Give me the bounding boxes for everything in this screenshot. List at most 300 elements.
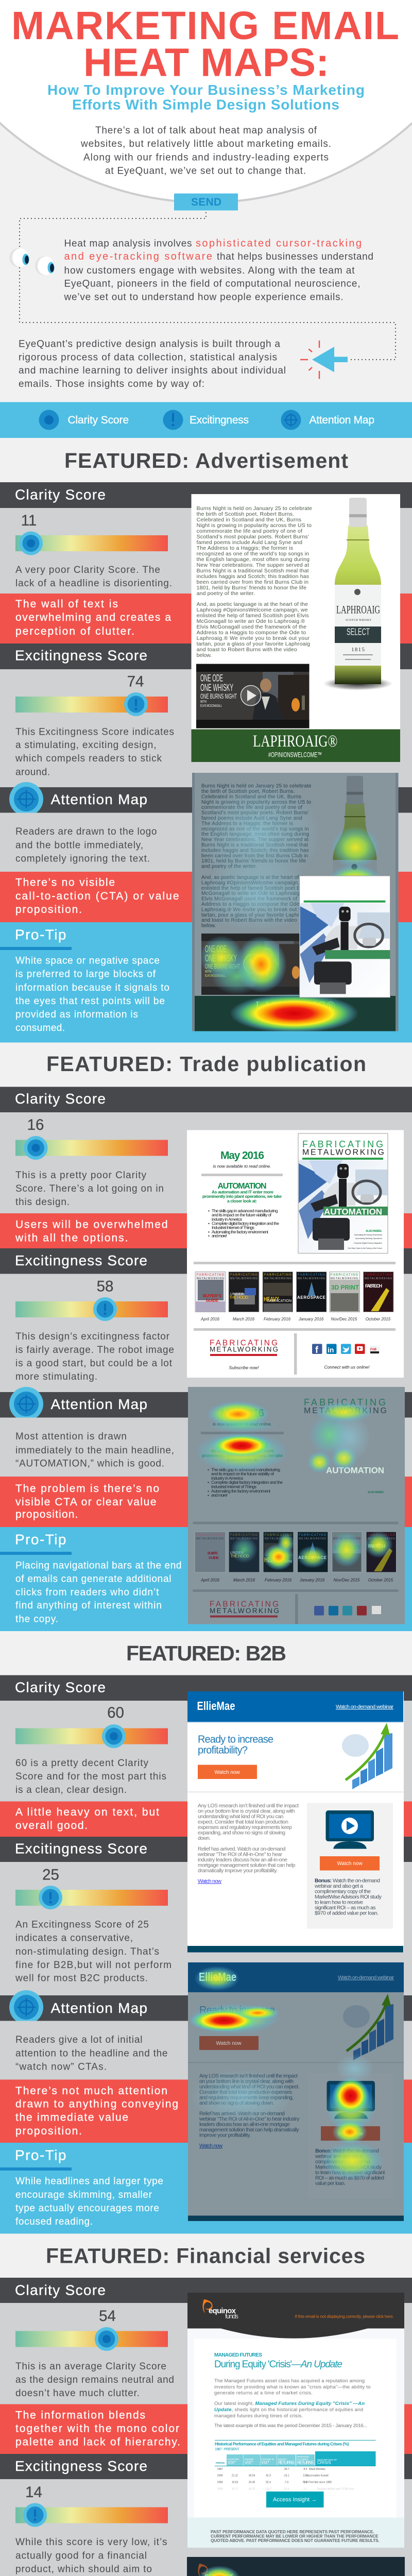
attention heat map: Ellie Mae: Ready to increase [199,2005,275,2016]
magazine cover: FABRICATING [302,1139,383,1149]
pro-tip panel: is preferred to large blocks of [15,969,156,980]
dotted path [20,213,396,360]
attention heat map: Fabricating Metalworking: AUTOMATION [326,1465,384,1476]
back-issue thumbnails: METALWORKING [365,1277,392,1280]
clarity score header: Clarity Score [15,1091,106,1107]
intro text [80,125,331,176]
heat map analysis paragraph: and eye-tracking software [64,251,212,262]
attention heat map: Ellie Mae: complimentary copy of the [315,2159,370,2165]
attention heat map: Ellie Mae [188,1962,404,2221]
clarity score header: Clarity Score [15,1680,106,1695]
attention heat map: Laphroaig: The Address to a Haggis; the former is [201,821,293,826]
callout: problem: The wall of text is [15,598,118,610]
excitingness panel: is fairly average. The robot image [15,1345,174,1355]
section heading: FEATURED: Trade publication [46,1052,366,1076]
performance table: ENDING [245,2458,254,2461]
performance table: 21.11 [232,2474,238,2477]
attention map panel: immediately to the main headline, [15,1445,174,1456]
bottle image: SCOTCH WHISKY [346,619,371,622]
attention heat map: Ellie Mae: to learn how to receive significant [315,2170,385,2176]
pro-tip panel: find anything of interest within [15,1600,162,1611]
social icons: in [328,1346,334,1354]
heat map analysis paragraph: EyeQuant, pioneers in the field of computational neuroscience, [64,278,360,290]
attention heat map: Fabricating Metalworking: May 2016 [220,1408,264,1419]
email screenshot: Equinox Funds: investors for providing what is known as "crisis alpha"—the ability to [214,2384,371,2390]
heat blobs [188,1966,384,2180]
clarity score panel: 16 [27,1116,44,1133]
attention map header [0,782,412,816]
pro-tip panel [0,2143,412,2234]
icon: eyes [9,248,55,275]
clarity gauge [15,532,168,555]
excitingness score header [0,1248,412,1274]
email screenshot: Fabricating Metalworking: May 2016 [220,1150,264,1161]
attention heat map: Laphroaig: WITH [205,970,211,974]
body copy: Relief has arrived. Watch our on-demand [199,2111,285,2116]
performance table: 1994 [217,2481,223,2484]
attention heat map: Fabricating Metalworking: October 2015 [368,1578,393,1583]
back-issue thumbnails: FABRICATING [365,1274,392,1277]
attention heat map: Fabricating Metalworking: METALWORKING [304,1406,387,1415]
email screenshot: Equinox Funds: The Managed Futures asset class has acquired a reputation among [214,2378,365,2384]
attention heat map: Laphroaig: Burns Night is held on January 25 to celebrate [201,784,312,789]
magazine cover: ALSO INSIDE: [366,1230,382,1233]
clarity score header: Clarity Score [15,486,106,503]
performance table: 124.7 [265,2487,271,2490]
pro-tip panel: focused reading. [15,2216,93,2227]
callout: problem [0,2404,412,2454]
body copy: industry leaders discuss how an all-in-one [198,1857,287,1863]
performance table: 44.28 [249,2487,255,2490]
clarity score panel: This is a pretty poor Clarity [15,1170,146,1181]
back-issue thumbnails: BUYER’S [203,1294,222,1298]
bottle image [323,498,393,690]
body copy: Watch now [198,1878,221,1885]
body copy: understanding what kind of ROI you can expect. [199,2084,300,2090]
callout: problem: proposition. [15,1509,78,1520]
bottle image: SELECT [347,626,370,637]
clarity score panel: 60 [107,1704,124,1721]
body copy: dramatically improve your profitability. [198,1868,278,1874]
dimmed thumbnails: AEROSPACE [298,1555,327,1560]
pro-tip panel: the copy. [15,1614,58,1625]
performance table [215,2440,376,2490]
icon: click arrow [300,341,348,379]
clarity score panel [0,1112,412,1213]
clarity score panel: 54 [99,2308,116,2325]
attention heat map: Laphroaig: recognized as one of the world’s top songs in [201,826,309,832]
email screenshot: Equinox Funds: QUOTED ABOVE. PAST PERFORMANCE DOES NOT GUARANTEE FUTURE RESULTS. [211,2538,380,2543]
performance table: Russian default and LTCM crisis [317,2487,354,2490]
metrics legend band: Clarity Score [68,414,129,426]
attention heat map: Laphroaig: and poetry of the writer. [201,864,257,870]
pro-tip panel: clicks from readers who didn’t [15,1587,159,1598]
body copy: on your bottom line is crystal clear, along with [198,1808,295,1815]
excitingness panel: fine for B2B,but will not perform [15,1960,171,1971]
dimmed thumbnails: FABRICATING [265,1534,292,1537]
excitingness panel: indicates a conservative, [15,1933,133,1943]
email screenshot: Laphroaig: Celebrated in Scotland and the UK, Burns [197,517,301,523]
clarity score panel [0,1701,412,1801]
email screenshot: Laphroaig: enlisted the help of famed Scottish poet Elvis [197,613,309,619]
email screenshot: Laphroaig: Elvis McGonagall used the framework of the [197,624,306,630]
pro-tip panel: encourage skimming, smaller [15,2190,152,2200]
attention heat map: Laphroaig: ONE BURNS NIGHT [205,962,240,970]
body copy: Any LOS research isn’t finished until the impact [199,2073,298,2079]
email screenshot: Equinox Funds: Update, sheds light on the historical performance of equities and [214,2407,363,2413]
performance table: VIX* [228,2461,236,2465]
attention map panel [0,813,412,872]
email screenshot: Ellie Mae: Watch now [214,1770,240,1775]
body copy: expanding, and show no signs of slowing [198,1830,285,1836]
dimmed thumbnails: UNDER [230,1551,244,1555]
email screenshot: Fabricating Metalworking: AUTOMATION [217,1182,267,1191]
email screenshot: Laphroaig: New Year celebrations. The supper served at [197,562,309,568]
heat blobs [194,1401,393,1570]
attention heat map: Fabricating Metalworking: ALSO INSIDE: [368,1491,384,1494]
clarity gauge [15,1136,168,1160]
magazine cover: AUTOMATION [324,1207,382,1217]
bottle image: 1815 [351,647,365,653]
excitingness panel: 14 [25,2484,42,2501]
attention heat map: Laphroaig: 1801, held by Burns’ friends to honor the life [201,858,306,864]
attention map header: Attention Map [50,1396,147,1412]
attention heat map: Laphroaig: the English language, most often sung during [201,832,309,837]
body copy: Any LOS research isn’t finished until the impact [198,1803,299,1809]
dimmed thumbnails [195,1532,397,1572]
attention heat map: Laphroaig: #OPINIONSWELCOME™ [270,1016,319,1024]
excitingness panel: This Excitingness Score indicates [15,726,174,738]
callout: problem [0,594,412,643]
excitingness panel [0,2479,412,2576]
email screenshot: Fabricating Metalworking: prominently into plant operations, we take [202,1194,282,1199]
webinar side panel: $970 of added value per loan. [315,1910,379,1917]
dimmed thumbnails: GUIDE [209,1555,219,1560]
performance table: Black Monday [309,2468,325,2471]
excitingness panel: 25 [42,1866,59,1884]
dimmed thumbnails: THE HOOD [230,1554,249,1558]
video thumbnail [196,664,309,728]
attention heat map: Fabricating Metalworking [188,876,405,1624]
heat blobs [199,2566,376,2576]
callout: problem: There’s not much attention [15,2085,167,2097]
heat map analysis paragraph: how customers engage with websites. Along with the team at [64,265,355,276]
email screenshot: Equinox Funds: generate returns at a time of market crisis. [214,2391,313,2396]
email screenshot: Laphroaig: famed poems include Auld Lang Syne and [197,539,302,546]
clarity score header: Clarity Score [15,2282,106,2298]
magazine cover: Automating Welding Operations [355,1238,382,1240]
performance table: VIX* [261,2461,269,2465]
body copy: on your bottom line is crystal clear, along with [199,2079,294,2084]
email screenshot: Laphroaig: recognized as one of the world’s top songs in [197,551,309,557]
email screenshot: Laphroaig: Address to a Haggis to compose the Ode to [197,630,306,636]
callout: no CTA [0,872,412,922]
dimmed thumbnails: METALWORKING [265,1537,292,1540]
growth chart image [342,1723,392,1789]
back-issue thumbnails: FABRICATION [267,1299,291,1303]
performance table: VIX* [245,2461,253,2465]
metrics legend band: Excitingness [190,414,249,426]
back-issue thumbnails: GUIDE [206,1298,219,1303]
excitingness panel: 58 [97,1278,113,1295]
email screenshot: Fabricating Metalworking: • [208,1229,210,1234]
webinar side panel: complimentary copy of the [315,1889,371,1895]
email screenshot: Equinox Funds: Access Insight → [273,2497,317,2503]
attention heat map: Laphroaig: LAPHROAIG [334,879,376,891]
attention heat map: Ellie Mae: Watch now [337,2131,363,2137]
attention heat map: Laphroaig: Scotland’s most popular poets. Robert Burns’ [201,810,309,816]
body copy: expect. Consider that total loan production [198,1819,288,1825]
attention heat map: Laphroaig: commemorate the life and poetry of one of [201,805,302,810]
callout: verdict: A little heavy on text, but [15,1806,159,1818]
email screenshot: Equinox Funds: Our latest insight, Managed Futures During Equity "Crisis" —An [214,2401,365,2406]
back-issue thumbnails: METALWORKING [197,1277,224,1280]
email screenshot: Fabricating Metalworking: Industrial Internet of Things [212,1225,254,1230]
webinar side panel: Bonus: Watch the on-demand [315,1877,380,1884]
callout: problem: with all the options. [15,1232,128,1244]
excitingness score header: Excitingness Score [15,2458,147,2474]
dimmed thumbnails: BUYER’S [208,1551,218,1555]
body copy [199,2073,300,2149]
attention heat map: Ellie Mae: MarketWise Advisors ROI study [315,2165,382,2170]
body copy: down. [198,1835,211,1841]
clarity score panel: Score. There’s a lot going on in [15,1183,164,1194]
magazine cover: One Step Closer to the Factory of the Future [348,1247,382,1249]
attention heat map: Laphroaig: famed poems include Auld Lang Syne and [201,816,302,821]
subtitle [47,82,365,112]
clarity score header [0,1675,412,1701]
excitingness score header [0,643,412,669]
attention heat map: Ellie Mae: Watch on-demand webinar [338,1974,394,1980]
email screenshot: Equinox Funds: managed futures during times of crisis. [214,2413,303,2419]
body copy [197,1803,299,1885]
webinar side panel: MarketWise Advisors ROI study [315,1894,382,1900]
dimmed thumbnails: METALWORKING [230,1537,258,1540]
pro-tip panel: type actually encourages more [15,2203,159,2214]
pro-tip panel: provided as information is [15,1009,138,1020]
performance table: 1990 [217,2474,223,2477]
section heading: FEATURED: Advertisement [64,449,348,472]
dimmed thumbnails: FABRICATING [196,1534,224,1537]
dimmed thumbnails: METALWORKING [299,1537,326,1540]
attention heat map: Fabricating Metalworking: FABRICATING [304,1397,386,1408]
back-issue labels: January 2016 [298,1317,324,1321]
attention heat map: Fabricating Metalworking: Nov/Dec 2015 [334,1578,360,1583]
EyeQuant predictive analysis paragraph: EyeQuant’s predictive design analysis is built through a [19,339,280,349]
dimmed thumbnails: METALWORKING [333,1537,360,1540]
pro-tip panel: the eyes that rest points will be [15,996,165,1007]
heat blobs [193,781,387,1033]
excitingness panel: around. [15,767,50,778]
email screenshot: Equinox Funds: The latest example of this was the period December 2015 - January 2016... [214,2423,367,2429]
attention heat map: Laphroaig: New Year celebrations. The supper served at [201,837,308,843]
heat map analysis paragraph [64,238,373,303]
body copy: expenses and regulatory requirements keep [198,1824,292,1831]
send button: SEND [191,196,221,208]
attention heat map: Laphroaig: Celebrated in Scotland and the UK, Burns [201,794,301,800]
email screenshot: Laphroaig: Laphroaig #OpinionsWelcome campaign, we [197,607,308,613]
excitingness panel: product, which should aim to [15,2564,152,2575]
back-issue thumbnails: FABRICATING [264,1274,291,1277]
excitingness gauge [15,1297,168,1321]
body copy: and show no signs of slowing down. [199,2100,274,2106]
subtitle: Efforts With Simple Design Solutions [72,97,339,112]
attention heat map: Fabricating Metalworking: Automating the factory environment [211,1488,271,1494]
webinar side panel [307,1803,393,1929]
callout: problem: palette and lack of hierarchy. [15,2436,180,2448]
attention heat map: Fabricating Metalworking: February 2016 [265,1578,292,1583]
clarity score panel: doesn’t have much clutter. [15,2388,140,2399]
pro-tip panel [0,922,412,1043]
icon: excitingness [163,410,183,430]
clarity score panel: A very poor Clarity Score. The [15,565,160,575]
pro-tip panel: Pro-Tip [15,926,66,943]
callout: problem: together with the mono color [15,2422,179,2435]
attention heat map: Ellie Mae: EllieMae [199,1970,236,1984]
EyeQuant predictive analysis paragraph: rigorous process of data collection, statistical analysis [19,352,277,363]
callout: problem [0,2079,412,2143]
attention heat map: Fabricating Metalworking: As automation and IT enter more [211,1448,274,1453]
excitingness score header: Excitingness Score [15,647,147,664]
clarity score panel: 60 is a pretty decent Clarity [15,1758,148,1769]
performance table: PERIOD [216,2462,225,2464]
performance table: 42.3 [266,2474,271,2477]
back-issue thumbnails: METALWORKING [264,1277,291,1280]
back-issue thumbnails: HEAVY [264,1295,279,1303]
performance table: 8.5 [304,2468,307,2471]
dimmed thumbnails: 3D PRINT [333,1544,362,1551]
attention heat map: Fabricating Metalworking: • [208,1467,209,1472]
performance table: MANAGED [297,2455,310,2458]
social icons: FAB [370,1348,377,1351]
magazine cover: METALWORKING [302,1148,384,1157]
pro-tip panel: White space or negative space [15,955,160,967]
dimmed thumbnails: METALWORKING [368,1537,395,1540]
performance table: 5.4 [304,2487,307,2490]
clarity score panel [0,508,412,594]
excitingness gauge [15,692,168,716]
attention map panel: Readers are drawn to the logo [15,826,157,837]
dimmed thumbnails: FABRICATING [368,1534,395,1537]
attention heat map: Fabricating Metalworking: • [208,1480,209,1485]
email screenshot: Laphroaig: commemorate the life and poetry of one of [197,528,302,534]
callout: no CTA: call-to-action (CTA) or value [15,890,179,902]
back-issue thumbnails: THE HOOD [229,1295,248,1300]
pro-tip panel: consumed. [15,1023,65,1033]
section: B2B [0,1641,412,2234]
email screenshot: Fabricating Metalworking: • [208,1208,210,1213]
footer logo: FABRICATING [210,1338,278,1348]
callout: problem: visible CTA or clear value [15,1496,157,1508]
email screenshot: Laphroaig: below. [197,652,212,658]
body copy: Relief has arrived. Watch our on-demand [198,1846,286,1852]
email screenshot: Laphroaig: and toast to Robert Burns with the video [197,647,297,653]
webinar side panel: to learn how to receive [315,1899,363,1905]
back-issue thumbnails: FABTECH [365,1283,382,1289]
attention heat map: Laphroaig: Laphroaig.® We invite you to break out your [201,907,310,912]
video thumbnail: WITH [200,700,207,704]
video thumbnail: ONE WHISKY [200,683,233,693]
attention map panel [0,2021,412,2080]
excitingness panel: more stimulating. [15,1371,97,1382]
body copy: Consider that total loan production expenses [199,2090,292,2095]
pro-tip panel: While headlines and larger type [15,2176,163,2187]
attention heat map: Fabricating Metalworking: and more! [211,1493,228,1498]
callout: problem: the immediate value [15,2111,128,2124]
clarity score panel: 11 [21,512,37,529]
attention heat map: Laphroaig: LAPHROAIG® [255,997,335,1016]
intro text: Along with our friends and industry-leading experts [83,152,329,163]
footer logo: METALWORKING [210,1346,278,1353]
email screenshot: Laphroaig: and poetry of the writer. [197,590,255,597]
attention heat map: Fabricating Metalworking: April 2016 [200,1578,220,1583]
attention heat map: Laphroaig: enlisted the help of famed Scottish poet Elvis [201,886,308,891]
attention heat map: Fabricating Metalworking: The skills gap in advanced manufacturing [211,1467,280,1472]
video thumbnail: ONE BURNS NIGHT [200,692,237,700]
email screenshot: Laphroaig: Burns Night is held on January 25 to celebrate [197,505,312,512]
performance table: DESCRIPTION OF [317,2459,337,2461]
back-issue labels [200,1317,391,1321]
metrics legend band: Attention Map [309,414,374,426]
callout: problem: drawn to anything conveying [15,2098,178,2110]
subtitle: How To Improve Your Business’s Marketing [47,82,365,98]
equinox logo [202,2299,239,2320]
email screenshot: Laphroaig [192,494,400,762]
EyeQuant predictive analysis paragraph: emails. Those insights come by way of: [19,379,204,389]
attention heat map: Ellie Mae: Bonus: Watch the on-demand [315,2148,379,2154]
footer logo: Subscribe now! [229,1365,259,1370]
excitingness score header: Excitingness Score [15,1252,147,1268]
body copy: webinar "The ROI of All-in-One" to hear industry [199,2116,300,2122]
send button [174,194,238,210]
attention heat map: Laphroaig: ONE ODE [205,944,227,954]
performance table: 92.4 [266,2481,271,2484]
attention heat map: Fabricating Metalworking: METALWORKING [210,1607,279,1615]
attention heat map: Laphroaig: been carried over from the first Burns Club in [201,853,308,859]
email screenshot: Laphroaig: tartan, pour a glass of your favorite Laphroaig [197,641,310,647]
excitingness panel: While this score is very low, it’s [15,2537,167,2548]
social icons: f [315,1345,319,1355]
performance table: 1987 - PRESENT [215,2448,239,2451]
title: HEAT MAPS: [83,40,329,84]
performance table: -14.1 [283,2474,289,2477]
section heading: FEATURED: B2B [126,1641,286,1665]
clarity gauge [15,1724,168,1748]
attention heat map: Ellie Mae: ROI – as much as $970 of added [315,2175,384,2181]
clarity score panel: This is an average Clarity Score [15,2361,166,2372]
email screenshot: Equinox Funds: CURRENT PERFORMANCE MAY BE LOWER OR HIGHER THAN THE PERFORMANCE [211,2534,379,2539]
back-issue thumbnails: FABRICATING [298,1274,325,1277]
webinar side panel: webinar and also get a [314,1883,363,1889]
back-issue thumbnails: FABRICATING [230,1274,258,1277]
clarity score panel: this design. [15,1197,70,1208]
email screenshot: Fabricating Metalworking: is now available to read online. [213,1163,271,1168]
heat map analysis paragraph: Heat map analysis involves [64,238,192,249]
email screenshot: Fabricating Metalworking: The skills gap in advanced manufacturing [212,1208,278,1213]
dimmed thumbnails: FABTECH [368,1544,385,1549]
excitingness panel: An Excitingness Score of 25 [15,1920,149,1930]
performance table: 1987 [217,2468,223,2471]
performance table: First Fed hike since 1989 [303,2481,332,2484]
excitingness gauge [15,2503,168,2527]
attention map panel: completely ignoring the text. [15,853,150,865]
pro-tip panel [0,1527,412,1631]
social icons: Connect with us online! [324,1364,370,1369]
excitingness gauge [15,1886,168,1909]
attention heat map: Equinox Funds [187,2557,405,2576]
email screenshot: Laphroaig: the birth of Scottish poet, Robert Burns. [197,511,294,517]
body copy: improve your profitability. [199,2133,251,2138]
